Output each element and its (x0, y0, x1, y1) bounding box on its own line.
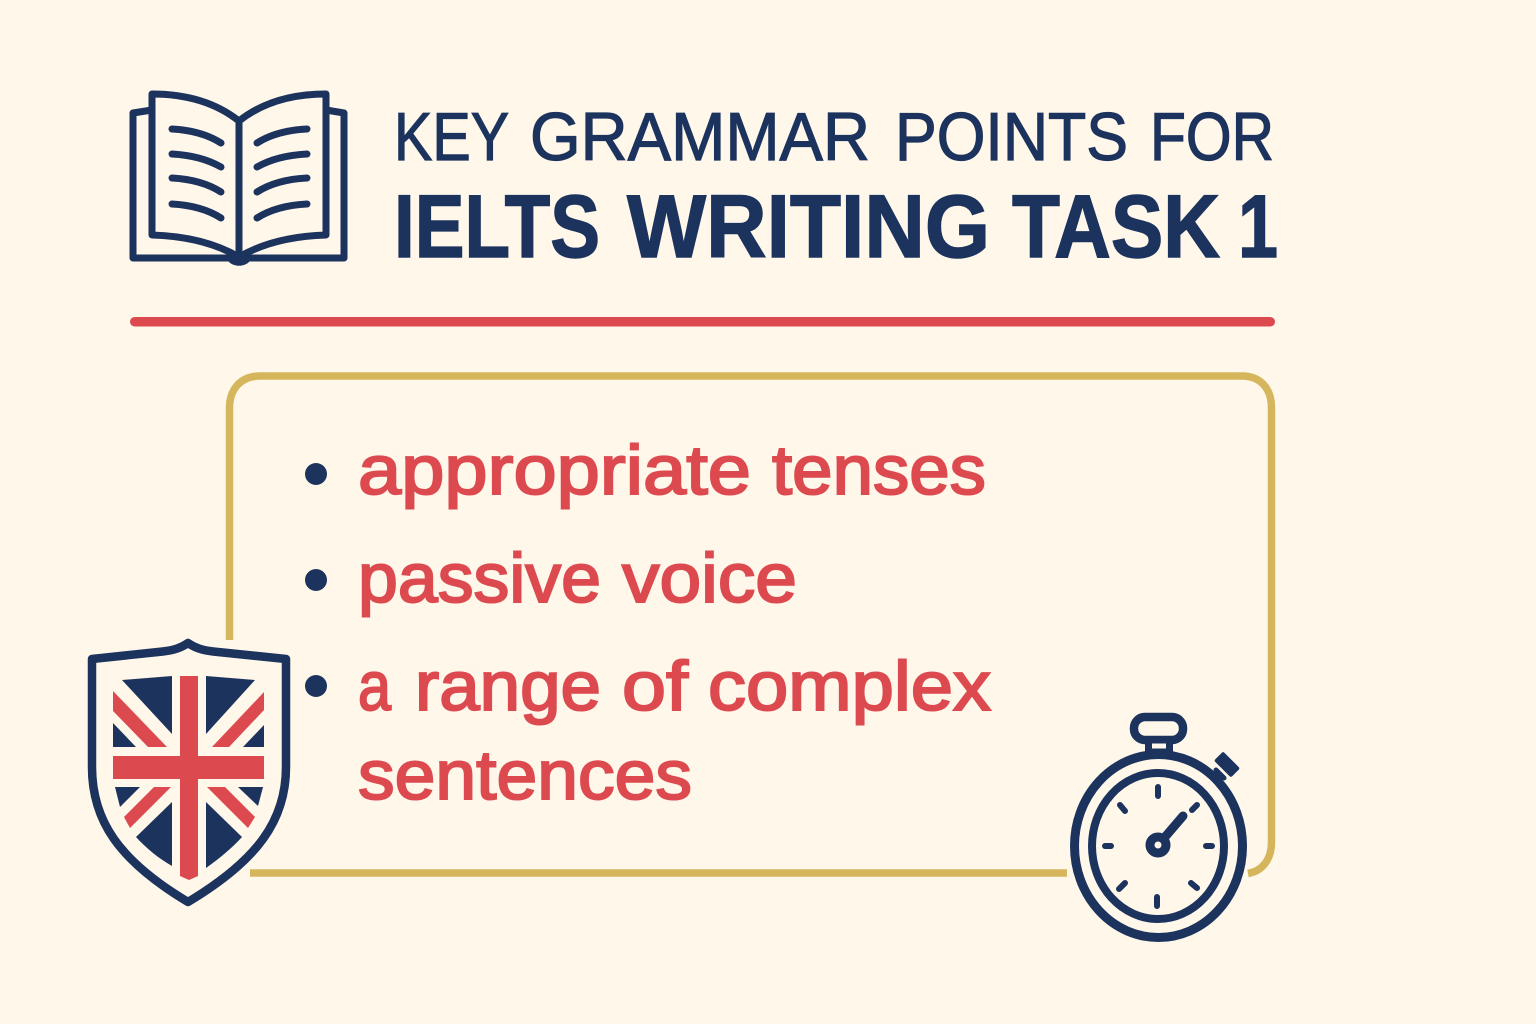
panel border (230, 376, 1272, 874)
point: passive voice: voice (622, 539, 797, 617)
title line 1: POINTS (895, 99, 1128, 175)
point: a range of complex sentences: a (358, 647, 391, 725)
bullet 1 (305, 463, 327, 485)
side button (1216, 770, 1224, 778)
tick marks (1105, 787, 1212, 906)
flag red cross and diagonals (113, 676, 264, 880)
title line 1: KEY (394, 99, 508, 175)
icon: stopwatch (1074, 717, 1242, 938)
icon: union jack shield (92, 643, 286, 902)
title line 1: FOR (1150, 99, 1274, 175)
flag navy fields (113, 676, 264, 868)
title line 1: GRAMMAR (530, 99, 870, 175)
point: a range of complex sentences: complex (708, 647, 991, 725)
crown (1134, 717, 1183, 740)
point continuation: sentences (358, 736, 692, 814)
red divider (130, 317, 1275, 326)
hand (1165, 816, 1183, 837)
point: a range of complex sentences: range (415, 647, 601, 725)
point: a range of complex sentences: of (622, 647, 689, 725)
shield outline (92, 643, 286, 902)
title line 2: 1 (1238, 176, 1278, 276)
bullet 2 (305, 569, 327, 591)
title line 2: IELTS (394, 176, 600, 276)
point: appropriate tenses: appropriate (358, 431, 751, 509)
outer ring (1074, 754, 1242, 938)
icon: open book (133, 94, 344, 266)
inner ring (1092, 773, 1224, 919)
bullet 3 (305, 675, 327, 697)
panel: grammar points (230, 376, 1272, 874)
title line 2: WRITING (627, 176, 990, 276)
point: passive voice: passive (358, 539, 601, 617)
title line 2: TASK (1012, 176, 1220, 276)
point: appropriate tenses: tenses (772, 431, 986, 509)
